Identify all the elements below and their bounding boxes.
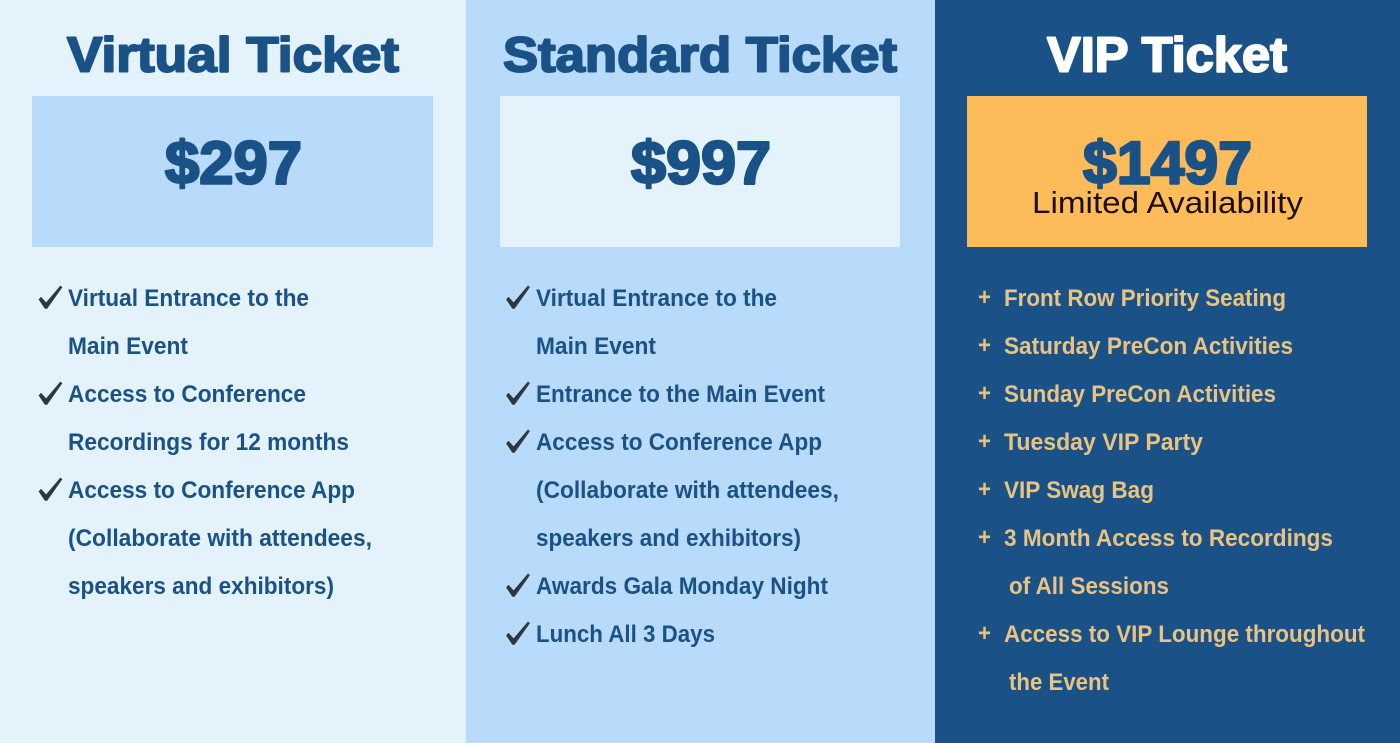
feature: recordings: 3 Month Access to Recordings: [1004, 525, 1333, 552]
feature: front row: Front Row Priority Seating: [1004, 285, 1286, 312]
feature: vip lounge, line 2: the Event: [1009, 669, 1109, 696]
feature list: standard: [506, 285, 839, 648]
icon: check mark: [506, 574, 530, 596]
feature: recordings, line 2: of All Sessions: [1009, 573, 1169, 600]
heading: virtual ticket: Virtual Ticket: [67, 28, 399, 82]
price box: $997: [500, 96, 900, 247]
feature: virtual entrance: Virtual Entrance to the: [68, 285, 309, 312]
feature: conference app, line 2: (Collaborate with attendees,: [536, 477, 839, 504]
icon: plus: +: [978, 284, 991, 311]
price box: $297: [32, 96, 433, 247]
icon: plus: +: [978, 524, 991, 551]
price box: $1497 limited availability: [967, 96, 1367, 247]
heading: vip ticket: VIP Ticket: [1047, 28, 1287, 82]
feature: sunday: Sunday PreCon Activities: [1004, 381, 1276, 408]
feature list: virtual: [39, 285, 372, 600]
heading: standard ticket: Standard Ticket: [503, 28, 897, 82]
feature: conference app, line 2: (Collaborate with attendees,: [68, 525, 372, 552]
feature: conference app: Access to Conference App: [68, 477, 355, 504]
icon: plus: +: [978, 380, 991, 407]
availability note: Limited Availability: [1032, 186, 1304, 220]
feature: swag bag: VIP Swag Bag: [1004, 477, 1154, 504]
feature list: vip: [978, 284, 1365, 696]
feature: awards gala: Awards Gala Monday Night: [536, 573, 828, 600]
feature: tuesday: Tuesday VIP Party: [1004, 429, 1203, 456]
feature: saturday: Saturday PreCon Activities: [1004, 333, 1293, 360]
icon: check mark: [506, 382, 530, 404]
feature: recordings: Access to Conference: [68, 381, 306, 408]
price box: $297: $297: [165, 130, 302, 196]
icon: check mark: [506, 430, 530, 452]
icon: plus: +: [978, 332, 991, 359]
feature: vip lounge: Access to VIP Lounge throughout: [1004, 621, 1365, 648]
icon: check mark: [39, 286, 62, 308]
feature: conference app, line 3: speakers and exhibitors): [68, 573, 334, 600]
icon: plus: +: [978, 620, 991, 647]
feature: main event entrance: Entrance to the Main Event: [536, 381, 825, 408]
feature: conference app: Access to Conference App: [536, 429, 822, 456]
panel: vip ticket: [935, 0, 1400, 743]
panel: virtual ticket: [0, 0, 466, 743]
price box: $997: $997: [631, 130, 771, 196]
feature: recordings, line 2: Recordings for 12 months: [68, 429, 349, 456]
icon: check mark: [39, 382, 62, 404]
feature: lunch: Lunch All 3 Days: [536, 621, 715, 648]
feature: conference app, line 3: speakers and exhibitors): [536, 525, 801, 552]
feature: virtual entrance, line 2: Main Event: [536, 333, 656, 360]
icon: plus: +: [978, 428, 991, 455]
feature: virtual entrance: Virtual Entrance to the: [536, 285, 777, 312]
panel: standard ticket: [466, 0, 935, 743]
icon: check mark: [39, 478, 62, 500]
price box: $1497 limited availability: $1497: [1083, 130, 1252, 196]
feature: virtual entrance, line 2: Main Event: [68, 333, 188, 360]
icon: check mark: [506, 622, 530, 644]
icon: plus: +: [978, 476, 991, 503]
icon: check mark: [506, 286, 530, 308]
